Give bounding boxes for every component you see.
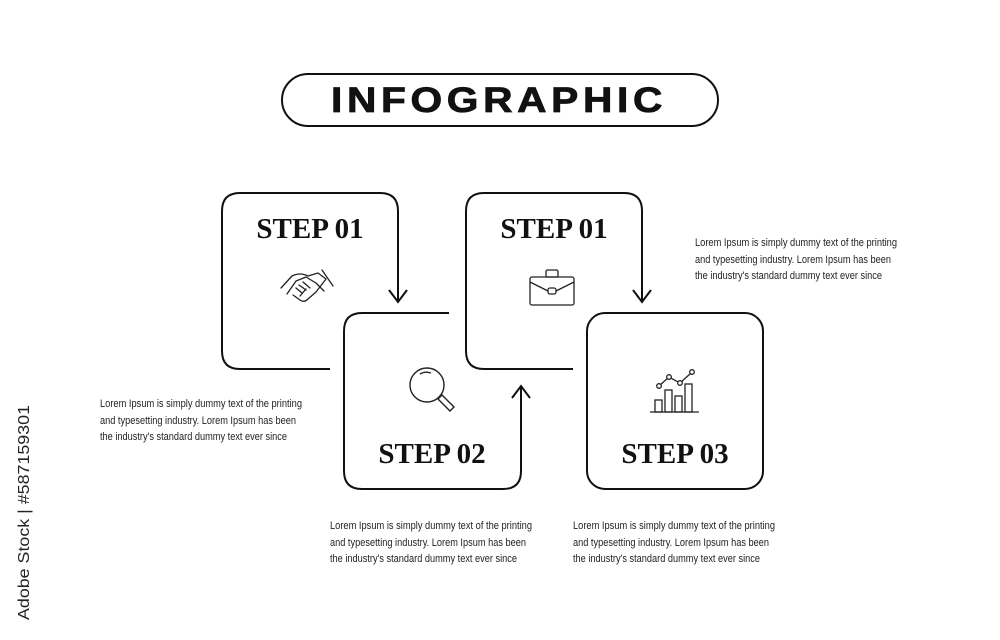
text block: bottom middle: the industry's standard dummy text ever since bbox=[330, 553, 517, 565]
text block: bottom middle: and typesetting industry. Lorem Ipsum has been bbox=[330, 537, 526, 549]
text block: bottom right: and typesetting industry. Lorem Ipsum has been bbox=[573, 537, 769, 549]
text block: left: and typesetting industry. Lorem Ipsum has been bbox=[100, 415, 296, 427]
text block: top right: and typesetting industry. Lorem Ipsum has been bbox=[695, 254, 891, 266]
text block: top right: the industry's standard dummy text ever since bbox=[695, 270, 882, 282]
heading: step 01 right: STEP 01 bbox=[500, 213, 608, 245]
text block: left: the industry's standard dummy text ever since bbox=[100, 431, 287, 443]
arrow: down right bbox=[633, 290, 651, 302]
text block: top right: Lorem Ipsum is simply dummy text of the printing bbox=[695, 237, 897, 249]
watermark id: Adobe Stock | #587159301 bbox=[16, 405, 33, 620]
heading: step 01 left: STEP 01 bbox=[256, 213, 364, 245]
panel: step 01 right bbox=[466, 193, 651, 369]
title bbox=[282, 74, 718, 126]
panel: step 01 left bbox=[222, 193, 407, 369]
title: INFOGRAPHIC bbox=[331, 81, 667, 120]
panel: step 02 bbox=[344, 313, 530, 489]
arrow: up bbox=[512, 386, 530, 398]
text block: bottom middle: Lorem Ipsum is simply dummy text of the printing bbox=[330, 520, 532, 532]
panel: step 03 bbox=[587, 313, 763, 489]
text block: bottom right: the industry's standard dummy text ever since bbox=[573, 553, 760, 565]
icon: briefcase bbox=[530, 270, 574, 305]
text block: bottom middle bbox=[330, 520, 532, 565]
text block: bottom right bbox=[573, 520, 775, 565]
icon: handshake bbox=[281, 270, 333, 301]
icon: chart bbox=[650, 370, 699, 412]
text block: top right bbox=[695, 237, 897, 282]
heading: step 03: STEP 03 bbox=[621, 438, 729, 470]
icon: magnifier bbox=[410, 368, 454, 411]
arrow: down left bbox=[389, 290, 407, 302]
text block: left: Lorem Ipsum is simply dummy text of the printing bbox=[100, 398, 302, 410]
heading: step 02: STEP 02 bbox=[378, 438, 486, 470]
text block: left bbox=[100, 398, 302, 443]
text block: bottom right: Lorem Ipsum is simply dummy text of the printing bbox=[573, 520, 775, 532]
